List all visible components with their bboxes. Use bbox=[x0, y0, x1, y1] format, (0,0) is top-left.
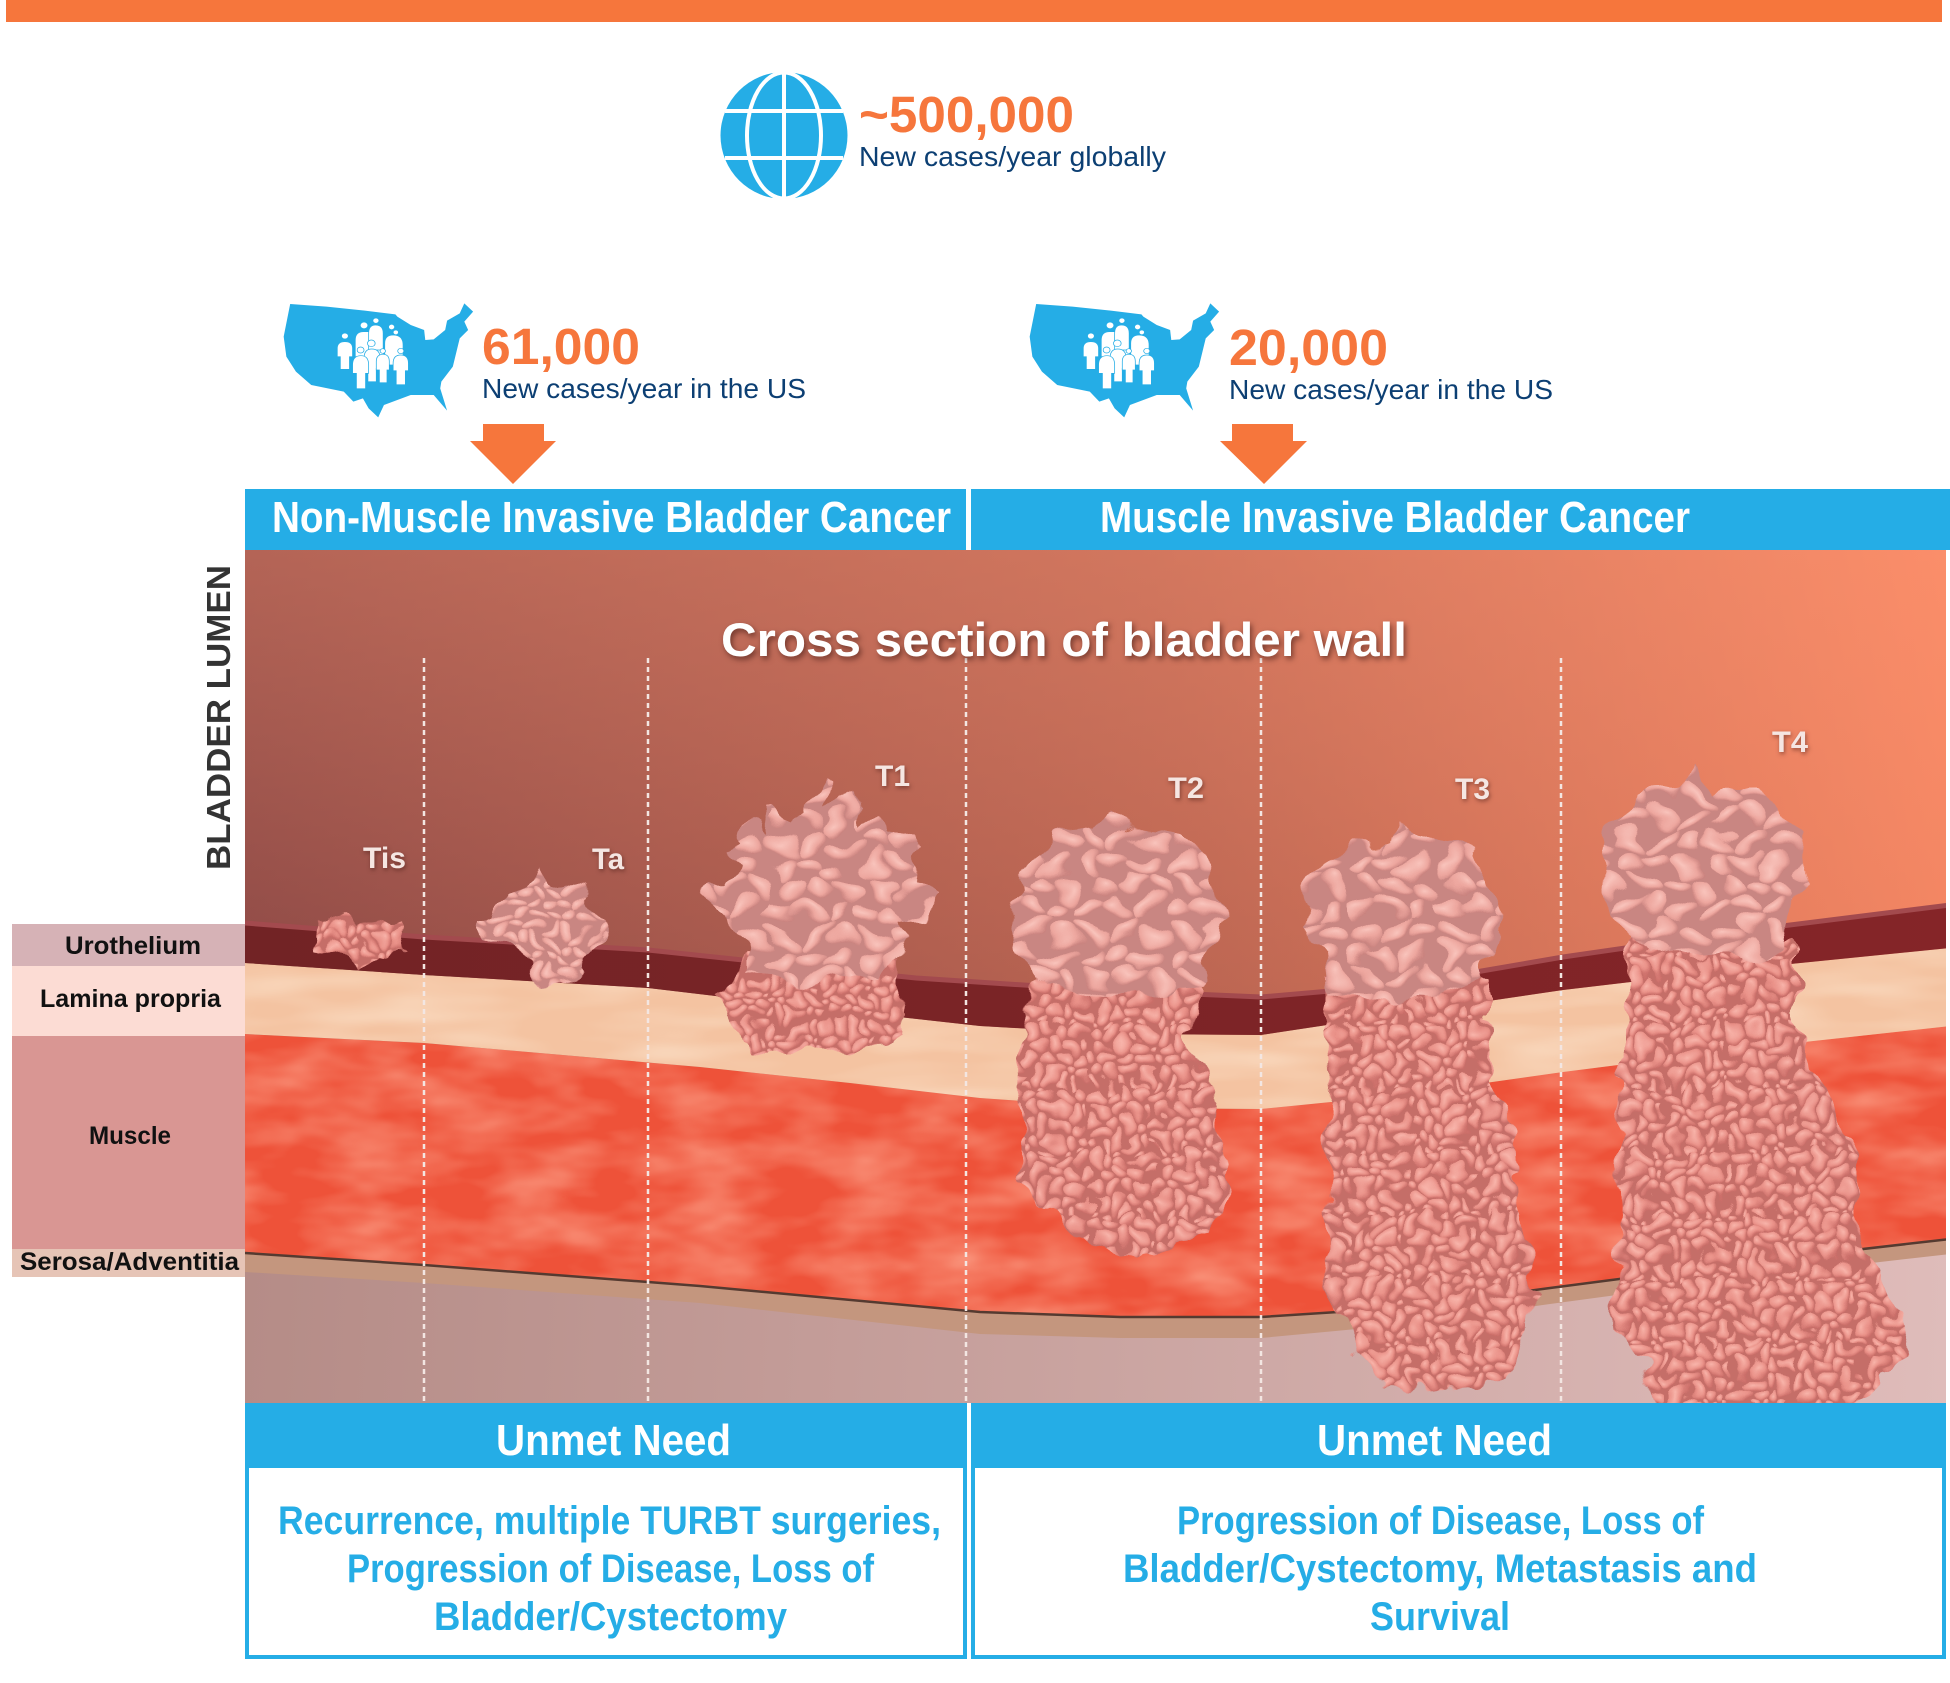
label: serosa/adventitia: Serosa/Adventitia bbox=[20, 1248, 240, 1276]
unmet need text: Recurrence, multiple TURBT surgeries, bbox=[278, 1499, 941, 1543]
panel: unmet need non-muscle invasive bbox=[245, 1403, 967, 1657]
tissue below serosa bbox=[245, 1254, 1946, 1403]
global case count: ~500,000 bbox=[859, 86, 1074, 143]
cross section illustration bbox=[245, 550, 1950, 1440]
panel: unmet need muscle invasive bbox=[971, 1403, 1946, 1657]
label: urothelium bbox=[12, 924, 245, 966]
header bar: non-muscle invasive: Non-Muscle Invasive Bladder Cancer bbox=[272, 493, 951, 542]
unmet need text bbox=[1123, 1499, 1757, 1639]
stage labels: T3 bbox=[1455, 773, 1490, 806]
US case caption left: New cases/year in the US bbox=[482, 373, 806, 404]
stage labels: T4 bbox=[1772, 726, 1808, 759]
serosa layer bbox=[245, 1239, 1950, 1338]
tumor: T4 bbox=[1601, 764, 1906, 1440]
unmet need text: Progression of Disease, Loss of bbox=[1177, 1499, 1705, 1543]
label: lamina propria bbox=[12, 966, 245, 1036]
stage divider lines bbox=[424, 658, 1561, 1403]
US case caption right: New cases/year in the US bbox=[1229, 374, 1553, 405]
unmet need text: Bladder/Cystectomy bbox=[434, 1595, 788, 1639]
icon: US map with people bbox=[1030, 303, 1219, 417]
US case count left: 61,000 bbox=[482, 318, 640, 375]
arrow: down to non-muscle invasive bbox=[470, 424, 556, 484]
global case caption: New cases/year globally bbox=[859, 141, 1166, 172]
US statistic: muscle invasive bbox=[1030, 303, 1553, 484]
header bar: muscle invasive bbox=[971, 489, 1950, 550]
heading bar bbox=[971, 1403, 1946, 1468]
stage labels: T2 bbox=[1168, 772, 1204, 805]
US case count right: 20,000 bbox=[1229, 319, 1388, 376]
lamina propria layer bbox=[245, 948, 1946, 1109]
arrow: down to muscle invasive bbox=[1220, 424, 1307, 484]
bladder lumen background bbox=[245, 550, 1946, 1109]
top orange bar bbox=[6, 0, 1942, 22]
urothelium layer bbox=[245, 905, 1950, 1035]
tumor: T2 bbox=[1008, 805, 1228, 1258]
US statistic: non-muscle invasive bbox=[284, 303, 806, 484]
global statistic bbox=[720, 71, 1166, 200]
label: muscle bbox=[12, 1036, 245, 1249]
illustration title: Cross section of bladder wall bbox=[721, 613, 1407, 666]
icon: globe bbox=[720, 71, 848, 200]
heading bar: Unmet Need bbox=[496, 1416, 731, 1465]
tumor: Ta bbox=[480, 868, 606, 982]
label: muscle: Muscle bbox=[89, 1122, 171, 1150]
tumor: T1 bbox=[697, 777, 935, 1052]
stage labels: Ta bbox=[592, 843, 624, 876]
tumor: Tis bbox=[314, 912, 402, 965]
label: urothelium: Urothelium bbox=[65, 932, 201, 960]
heading bar: Unmet Need bbox=[1317, 1416, 1552, 1465]
stage labels bbox=[363, 726, 1808, 876]
label: lamina propria: Lamina propria bbox=[40, 985, 222, 1013]
header bar: muscle invasive: Muscle Invasive Bladder Cancer bbox=[1100, 493, 1690, 542]
unmet need text: Survival bbox=[1370, 1595, 1510, 1639]
icon: US map with people bbox=[284, 303, 473, 417]
stage labels: T1 bbox=[875, 760, 910, 793]
unmet need text bbox=[278, 1499, 941, 1639]
vertical label: bladder lumen: BLADDER LUMEN bbox=[200, 565, 237, 870]
tumor: T3 bbox=[1300, 820, 1535, 1390]
stage labels: Tis bbox=[363, 842, 406, 875]
unmet need text: Progression of Disease, Loss of bbox=[347, 1547, 875, 1591]
heading bar bbox=[245, 1403, 967, 1468]
muscle layer bbox=[245, 1020, 1950, 1320]
layer labels bbox=[12, 924, 245, 1277]
unmet need text: Bladder/Cystectomy, Metastasis and bbox=[1123, 1547, 1757, 1591]
